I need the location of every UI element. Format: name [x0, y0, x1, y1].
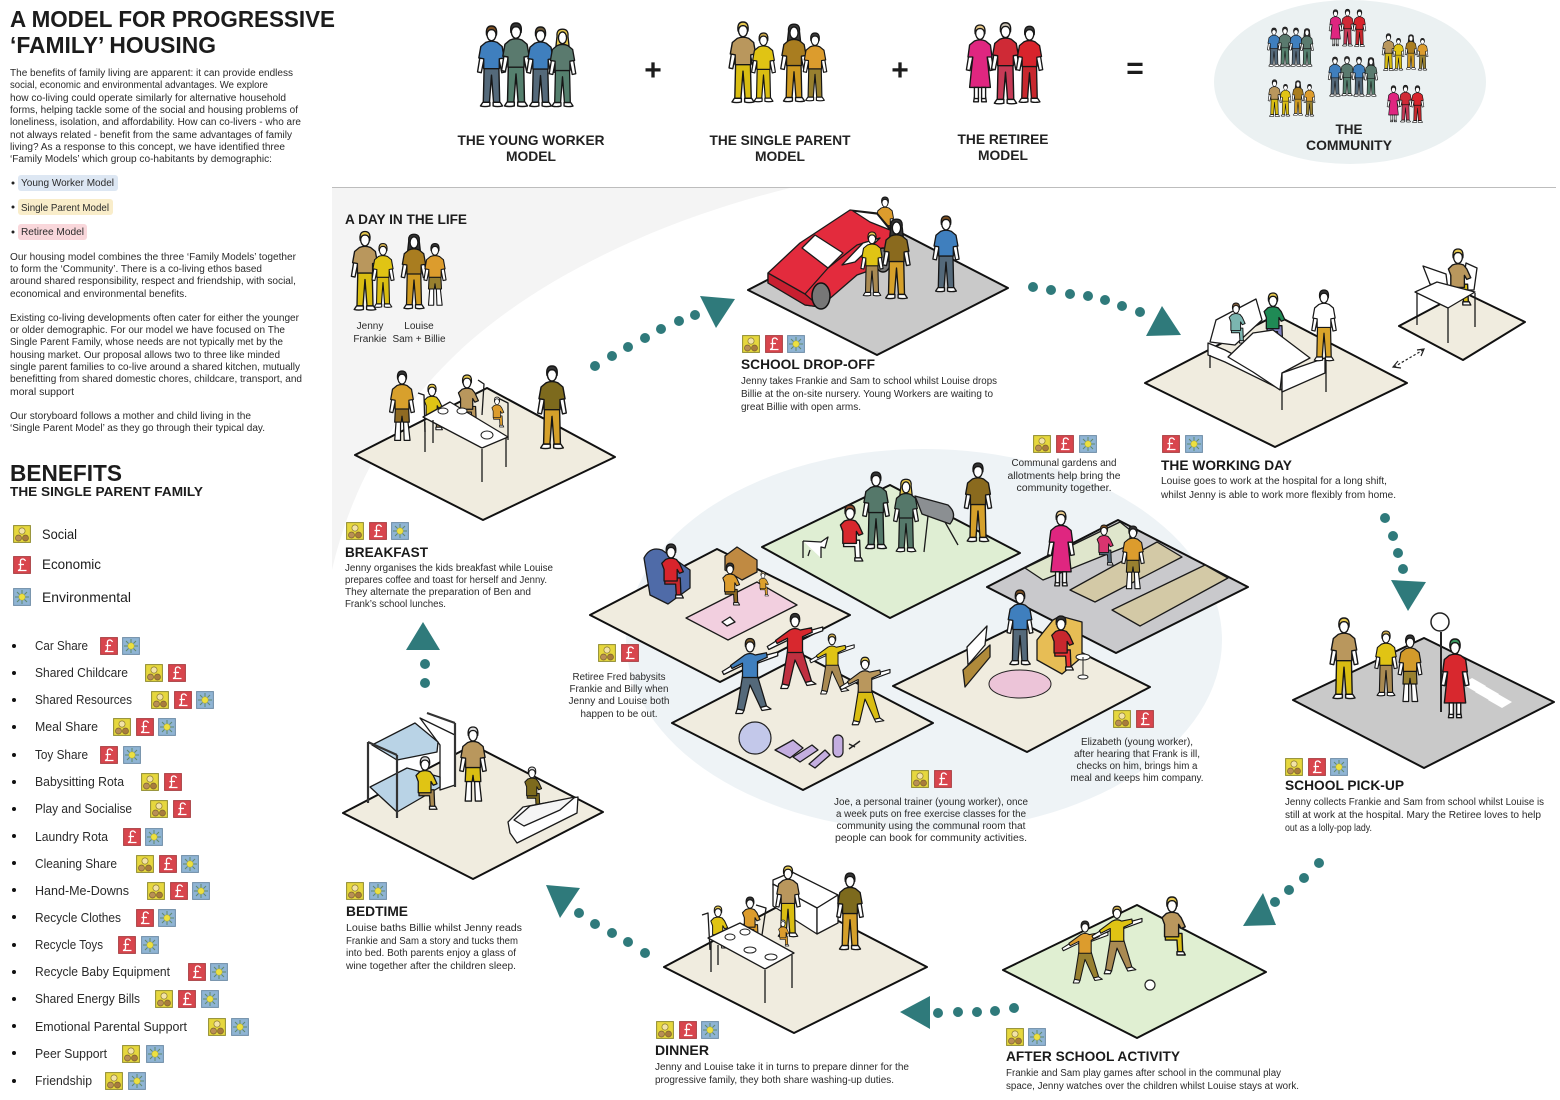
- benefits heading: [10, 460, 203, 499]
- icon: retiree model group: [966, 23, 1043, 104]
- intro text: not always related - benefit from the same advantages of family: [10, 130, 292, 141]
- central community ellipse: [626, 449, 1222, 831]
- scene: after school activity: [1003, 897, 1266, 1038]
- care visit caption: meal and keeps him company.: [1070, 773, 1204, 784]
- title: [10, 6, 335, 58]
- housing model text: Our storyboard follows a mother and child living in the: [10, 411, 251, 422]
- dinner caption: Jenny and Louise take it in turns to prepare dinner for the: [655, 1062, 909, 1073]
- scene: bedtime: [343, 713, 603, 879]
- communal garden caption: Communal gardens and: [1012, 458, 1116, 469]
- arrow: breakfast to school drop-off: [590, 296, 735, 371]
- title: A MODEL FOR PROGRESSIVE: [10, 6, 335, 32]
- school pick-up caption: out as a lolly-pop lady.: [1285, 823, 1372, 834]
- housing model text: housing market. Our proposal allows two to three like minded: [10, 350, 280, 361]
- arrow: commute double-headed: [1393, 349, 1424, 368]
- breakfast caption: [345, 523, 553, 610]
- school pick-up caption: [1285, 759, 1544, 834]
- housing model text: to form the ‘Community’. There is a co-living ethos based: [10, 264, 262, 275]
- model labels: THE RETIREE: [958, 132, 1048, 147]
- school drop-off caption: SCHOOL DROP-OFF: [741, 356, 875, 372]
- scene: care visit: [893, 590, 1150, 752]
- icon: single parent model group: [729, 22, 827, 103]
- school pick-up caption: Jenny collects Frankie and Sam from school whilst Louise is: [1285, 797, 1544, 808]
- after school caption: space, Jenny watches over the children whilst Louise stays at work.: [1006, 1081, 1299, 1092]
- school drop-off caption: Billie at the on-site nursery. Young Workers are waiting to: [741, 389, 993, 400]
- breakfast caption: prepares coffee and toast for herself and Jenny.: [345, 575, 547, 586]
- intro text: loneliness, isolation, and affordability. How can co-livers - who are: [10, 117, 301, 128]
- housing model text: economical and environmental benefits.: [10, 289, 187, 300]
- benefits list: Car Share: [35, 638, 88, 653]
- model labels: [458, 132, 1048, 164]
- after school caption: Frankie and Sam play games after school in the communal play: [1006, 1068, 1281, 1079]
- benefits legend: Environmental: [42, 589, 131, 605]
- background swoosh: [332, 188, 790, 570]
- after school caption: [1006, 1029, 1299, 1092]
- intro text: living? As a response to this concept, we have identified three: [10, 142, 285, 153]
- breakfast caption: They alternate the preparation of Ben and: [345, 587, 531, 598]
- scene: breakfast: [355, 366, 615, 520]
- school drop-off caption: Jenny takes Frankie and Sam to school whilst Louise drops: [741, 376, 997, 387]
- arrow: dinner to bedtime: [546, 885, 650, 958]
- babysitting caption: [568, 645, 670, 720]
- housing model text: single parent families to co-live around a shared kitchen, mutually: [10, 362, 300, 373]
- breakfast caption: Frank’s school lunches.: [345, 599, 446, 610]
- scene: home office: [1399, 249, 1525, 360]
- school drop-off caption: great Billie with open arms.: [741, 402, 861, 413]
- model labels: MODEL: [755, 149, 805, 164]
- intro text: how co-living could operate similarly for alternative household: [10, 93, 286, 104]
- benefits list: Meal Share: [35, 719, 98, 734]
- characters: Jenny, Frankie, Louise, Sam and Billie: Frankie: [353, 334, 387, 345]
- characters: Jenny, Frankie, Louise, Sam and Billie: [351, 232, 446, 345]
- school drop-off caption: [741, 336, 997, 413]
- housing model text: ‘Single Parent Model’ as they go through their typical day.: [10, 423, 265, 434]
- benefits list: Emotional Parental Support: [35, 1019, 187, 1034]
- exercise class caption: a week puts on free exercise classes for the: [836, 809, 1026, 820]
- dinner caption: DINNER: [655, 1042, 709, 1058]
- model labels: THE YOUNG WORKER: [458, 133, 605, 148]
- school pick-up caption: SCHOOL PICK-UP: [1285, 777, 1404, 793]
- bedtime caption: into bed. Both parents enjoy a glass of: [346, 948, 516, 959]
- exercise class caption: community using the communal room that: [836, 821, 1026, 832]
- characters: Jenny, Frankie, Louise, Sam and Billie: Jenny: [357, 321, 383, 332]
- model list highlights: Young Worker Model: [21, 178, 114, 189]
- model list highlights: Retiree Model: [21, 227, 84, 238]
- working day caption: THE WORKING DAY: [1161, 457, 1293, 473]
- care visit caption: Elizabeth (young worker),: [1081, 737, 1193, 748]
- benefits list: Friendship: [35, 1073, 92, 1088]
- benefits list: Toy Share: [35, 747, 88, 762]
- housing model text: Existing co-living developments often cater for either the younger: [10, 313, 300, 324]
- housing model text: or older demographic. For our model we have focused on The: [10, 325, 285, 336]
- working day caption: whilst Jenny is able to work more flexibly from home.: [1160, 490, 1396, 501]
- housing model text: moral support: [10, 387, 74, 398]
- communal garden caption: allotments help bring the: [1008, 471, 1121, 482]
- equals sign: =: [1126, 52, 1144, 85]
- benefits list: Play and Socialise: [35, 801, 132, 816]
- housing model text: [10, 252, 302, 434]
- dinner caption: [655, 1022, 909, 1086]
- model labels: MODEL: [978, 148, 1028, 163]
- babysitting caption: Frankie and Billy when: [570, 684, 668, 695]
- dinner caption: progressive family, they both share washing-up duties.: [655, 1075, 894, 1086]
- scene: the working day: [1145, 290, 1407, 447]
- plus sign: +: [644, 54, 662, 87]
- communal garden caption: community together.: [1016, 483, 1112, 494]
- exercise class caption: Joe, a personal trainer (young worker), once: [834, 797, 1028, 808]
- care visit caption: after hearing that Frank is ill,: [1074, 749, 1200, 760]
- intro text: forms, helping tackle some of the social and housing problems of: [10, 105, 298, 116]
- care visit caption: [1070, 711, 1204, 784]
- community ellipse: COMMUNITY: [1306, 138, 1392, 153]
- title: ‘FAMILY’ HOUSING: [10, 32, 216, 58]
- school pick-up caption: still at work at the hospital. Mary the Retiree loves to help: [1285, 810, 1541, 821]
- babysitting caption: happen to be out.: [580, 709, 658, 720]
- benefits list: Hand-Me-Downs: [35, 883, 129, 898]
- benefits list: Cleaning Share: [35, 856, 117, 871]
- benefits legend: Economic: [42, 556, 101, 572]
- benefits legend: [14, 526, 131, 605]
- model list highlights: [12, 175, 118, 240]
- working day caption: [1160, 436, 1396, 501]
- arrow: working day to school pick-up: [1380, 513, 1426, 611]
- care visit caption: checks on him, brings him a: [1076, 761, 1198, 772]
- scene: school pick-up: [1293, 613, 1554, 768]
- exercise class caption: people can book for community activities.: [835, 833, 1027, 844]
- arrow: school pick-up to after school: [1243, 858, 1324, 926]
- housing model text: Single Parent Family, whose needs are not typically met by the: [10, 337, 283, 348]
- intro text: ‘Family Models’ which group co-habitants by demographic:: [10, 154, 272, 165]
- arrow: school drop-off to working day: [1028, 282, 1181, 336]
- plus sign: +: [891, 54, 909, 87]
- babysitting caption: Retiree Fred babysits: [572, 672, 666, 683]
- benefits list: [12, 638, 248, 1089]
- working day caption: Louise goes to work at the hospital for a long shift,: [1161, 476, 1387, 487]
- bedtime caption: BEDTIME: [346, 903, 408, 919]
- benefits list: Shared Resources: [35, 692, 132, 707]
- benefits list: Shared Energy Bills: [35, 991, 140, 1006]
- community ellipse: [1214, 0, 1486, 164]
- scene: communal garden: [762, 463, 1020, 618]
- model labels: MODEL: [506, 149, 556, 164]
- intro text: social, economic and environmental advantages. We explore: [10, 80, 268, 91]
- scene: school drop-off: [748, 197, 1008, 355]
- bedtime caption: Frankie and Sam a story and tucks them: [346, 936, 518, 947]
- benefits list: Recycle Toys: [35, 937, 103, 952]
- breakfast caption: Jenny organises the kids breakfast while Louise: [345, 563, 553, 574]
- exercise class caption: [834, 771, 1028, 844]
- a day in the life heading: A DAY IN THE LIFE: [345, 211, 467, 227]
- scene: communal lounge babysitting: [590, 544, 850, 682]
- scene: dinner: [664, 866, 927, 1033]
- benefits heading: THE SINGLE PARENT FAMILY: [10, 484, 203, 499]
- benefits list: Shared Childcare: [35, 665, 128, 680]
- community ellipse: THE: [1336, 122, 1362, 137]
- housing model text: around shared responsibility, respect and friendship, with social,: [10, 276, 296, 287]
- model list highlights: Single Parent Model: [21, 203, 109, 214]
- characters: Jenny, Frankie, Louise, Sam and Billie: Sam + Billie: [392, 334, 446, 345]
- housing model text: benefitting from shared domestic chores, childcare, transport, and: [10, 374, 302, 385]
- benefits list: Babysitting Rota: [35, 774, 125, 789]
- arrow: after school to dinner: [900, 996, 1019, 1029]
- housing model text: Our housing model combines the three ‘Family Models’ together: [10, 252, 297, 263]
- benefits legend: Social: [42, 526, 77, 542]
- breakfast caption: BREAKFAST: [345, 544, 428, 560]
- model labels: THE SINGLE PARENT: [710, 133, 851, 148]
- benefits list: Peer Support: [35, 1046, 107, 1061]
- icon: young worker model group: [478, 23, 576, 107]
- characters: Jenny, Frankie, Louise, Sam and Billie: Louise: [404, 321, 434, 332]
- arrow: bedtime to breakfast: [406, 622, 440, 688]
- babysitting caption: Jenny and Louise both: [568, 696, 670, 707]
- bedtime caption: [345, 883, 522, 972]
- communal garden caption: [1008, 436, 1121, 494]
- benefits heading: BENEFITS: [10, 460, 122, 486]
- scene: allotments: [987, 511, 1248, 653]
- bedtime caption: wine together after the children sleep.: [345, 961, 516, 972]
- scene: exercise class: [672, 614, 933, 790]
- benefits list: Laundry Rota: [35, 829, 109, 844]
- after school caption: AFTER SCHOOL ACTIVITY: [1006, 1048, 1181, 1064]
- benefits list: Recycle Baby Equipment: [35, 964, 170, 979]
- intro text: The benefits of family living are apparent: it can provide endless: [10, 68, 293, 79]
- intro text: [10, 68, 301, 165]
- bedtime caption: Louise baths Billie whilst Jenny reads: [346, 923, 522, 934]
- benefits list: Recycle Clothes: [35, 910, 121, 925]
